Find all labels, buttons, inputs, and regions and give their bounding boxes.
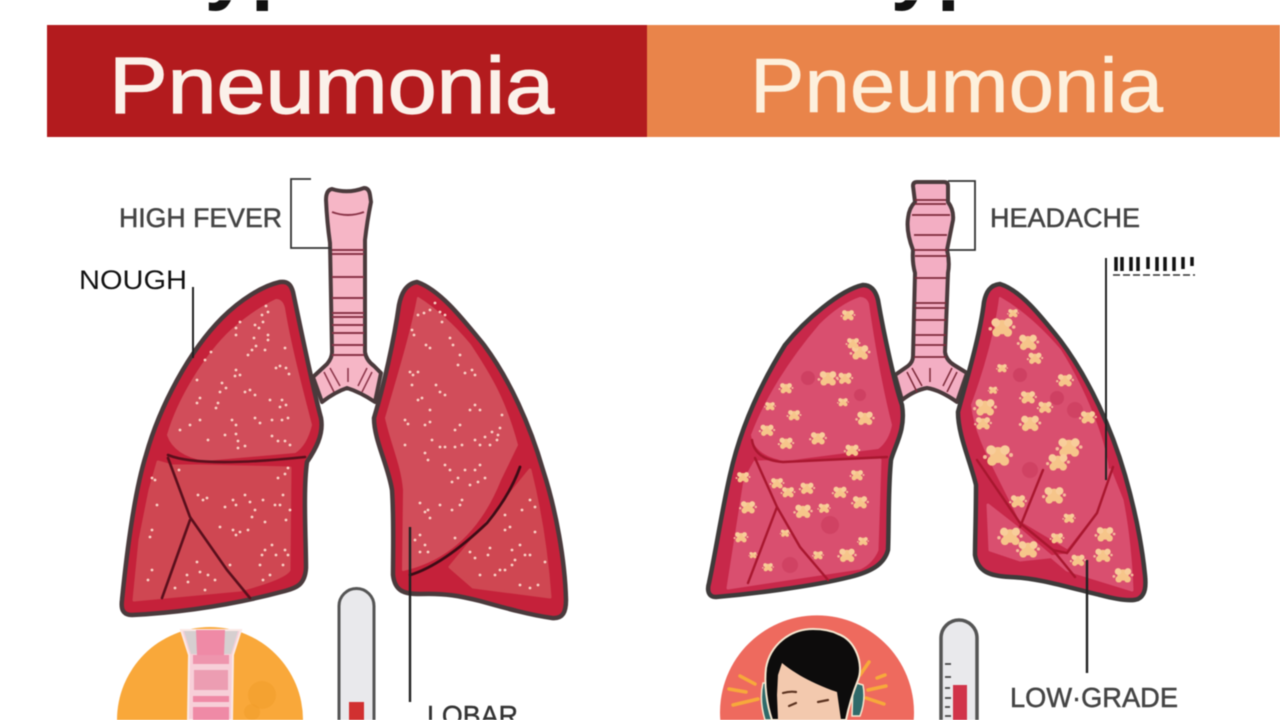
eyebrows and eyes: [783, 692, 828, 706]
label: headache with bracket: [948, 181, 1140, 250]
consolidation patches: [973, 309, 1134, 583]
speckles: [148, 306, 290, 590]
label: high fever with bracket: HIGH FEVER: [119, 203, 282, 233]
header band: atypical pneumonia: Pneumonia: [750, 43, 1163, 129]
label: low-grade with leader line: LOW·GRADE: [1010, 682, 1178, 713]
icon: low-grade thermometer: [941, 620, 977, 720]
icon: inflamed throat: [117, 627, 303, 720]
header band: typical pneumonia: [47, 25, 647, 137]
right lung: [958, 284, 1145, 600]
header band: atypical pneumonia: [647, 25, 1280, 137]
label: cough with leader line: [79, 265, 193, 358]
label: high fever with bracket: [119, 179, 331, 248]
headphones: [761, 682, 864, 720]
hair: [765, 629, 860, 720]
consolidation patches: [734, 310, 875, 571]
label: garbled text with leader line: [1106, 257, 1195, 480]
trachea: [895, 182, 967, 402]
header band: typical pneumonia: Pneumonia: [109, 41, 555, 130]
trachea: [313, 188, 381, 402]
left lung: [708, 285, 903, 597]
panel: typical lungs: [122, 188, 566, 618]
label: cough with leader line: NOUGH: [79, 265, 187, 295]
icon: person with headache: [720, 615, 914, 720]
panel: atypical lungs: [708, 182, 1145, 600]
right lung: [374, 282, 566, 618]
left lung: [122, 282, 322, 615]
speckles: [405, 303, 545, 588]
label: headache with bracket: HEADACHE: [990, 203, 1140, 233]
icon: high thermometer: [339, 588, 374, 720]
pain rays: [729, 662, 886, 705]
face: [777, 663, 841, 720]
